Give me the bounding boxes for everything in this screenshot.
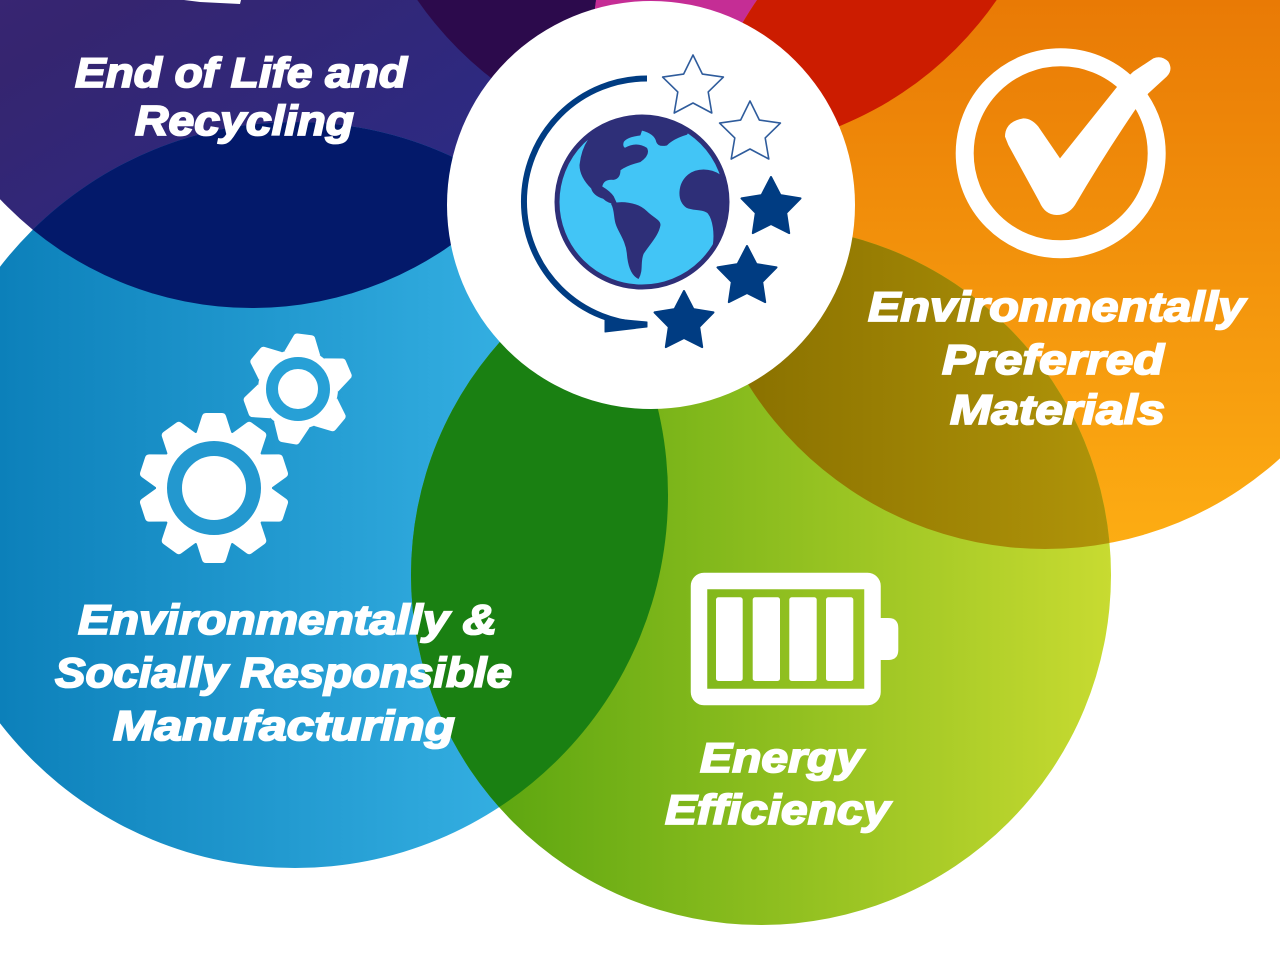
- heading: Environmentally Preferred Materials: Environmentally: [868, 283, 1248, 330]
- heading: End of Life and Recycling: Recycling: [135, 97, 354, 144]
- heading: Energy Efficiency: [665, 734, 893, 833]
- heading: Environmentally Preferred Materials: Materials: [950, 386, 1165, 433]
- icon: globe with orbit and stars: [524, 55, 800, 347]
- icon: check mark in circle: [965, 57, 1170, 249]
- heading: Environmentally and Socially Responsible Manufacturing: Socially Responsible: [55, 649, 512, 696]
- overlap: purple and magenta: [418, 0, 596, 78]
- heading: Environmentally and Socially Responsible Manufacturing: [55, 596, 512, 749]
- heading: End of Life and Recycling: [75, 49, 408, 144]
- heading: Environmentally Preferred Materials: [868, 283, 1248, 433]
- small gear: [240, 332, 356, 446]
- large gear: [137, 413, 291, 563]
- icon: gears: [137, 332, 356, 563]
- overlap: purple and blue: [32, 122, 453, 308]
- center white circle: [447, 1, 855, 409]
- globe: [557, 107, 733, 287]
- icon: battery: [699, 581, 898, 697]
- circle: orange materials: [695, 0, 1280, 549]
- circle: magenta top: [355, 0, 1059, 152]
- heading: Energy Efficiency: Efficiency: [665, 786, 893, 833]
- circle: purple end of life: [0, 0, 598, 308]
- circle: blue manufacturing: [0, 122, 668, 868]
- heading: Environmentally Preferred Materials: Preferred: [942, 336, 1166, 383]
- circle: green energy: [411, 225, 1111, 925]
- overlap: magenta and orange: [742, 0, 996, 126]
- orbit arc: [524, 78, 647, 324]
- outline stars: [663, 55, 780, 159]
- heading: Environmentally and Socially Responsible Manufacturing: Manufacturing: [113, 702, 455, 749]
- overlap: blue and green: [411, 342, 668, 808]
- heading: Environmentally and Socially Responsible Manufacturing: Environmentally &: [78, 596, 497, 643]
- solid stars: [654, 177, 800, 347]
- heading: Energy Efficiency: Energy: [700, 734, 866, 781]
- heading: End of Life and Recycling: End of Life and: [75, 49, 408, 96]
- overlap: orange and green: [748, 237, 1110, 549]
- orbit arrowhead: [605, 318, 647, 332]
- icon fragment at top edge: [184, 0, 241, 4]
